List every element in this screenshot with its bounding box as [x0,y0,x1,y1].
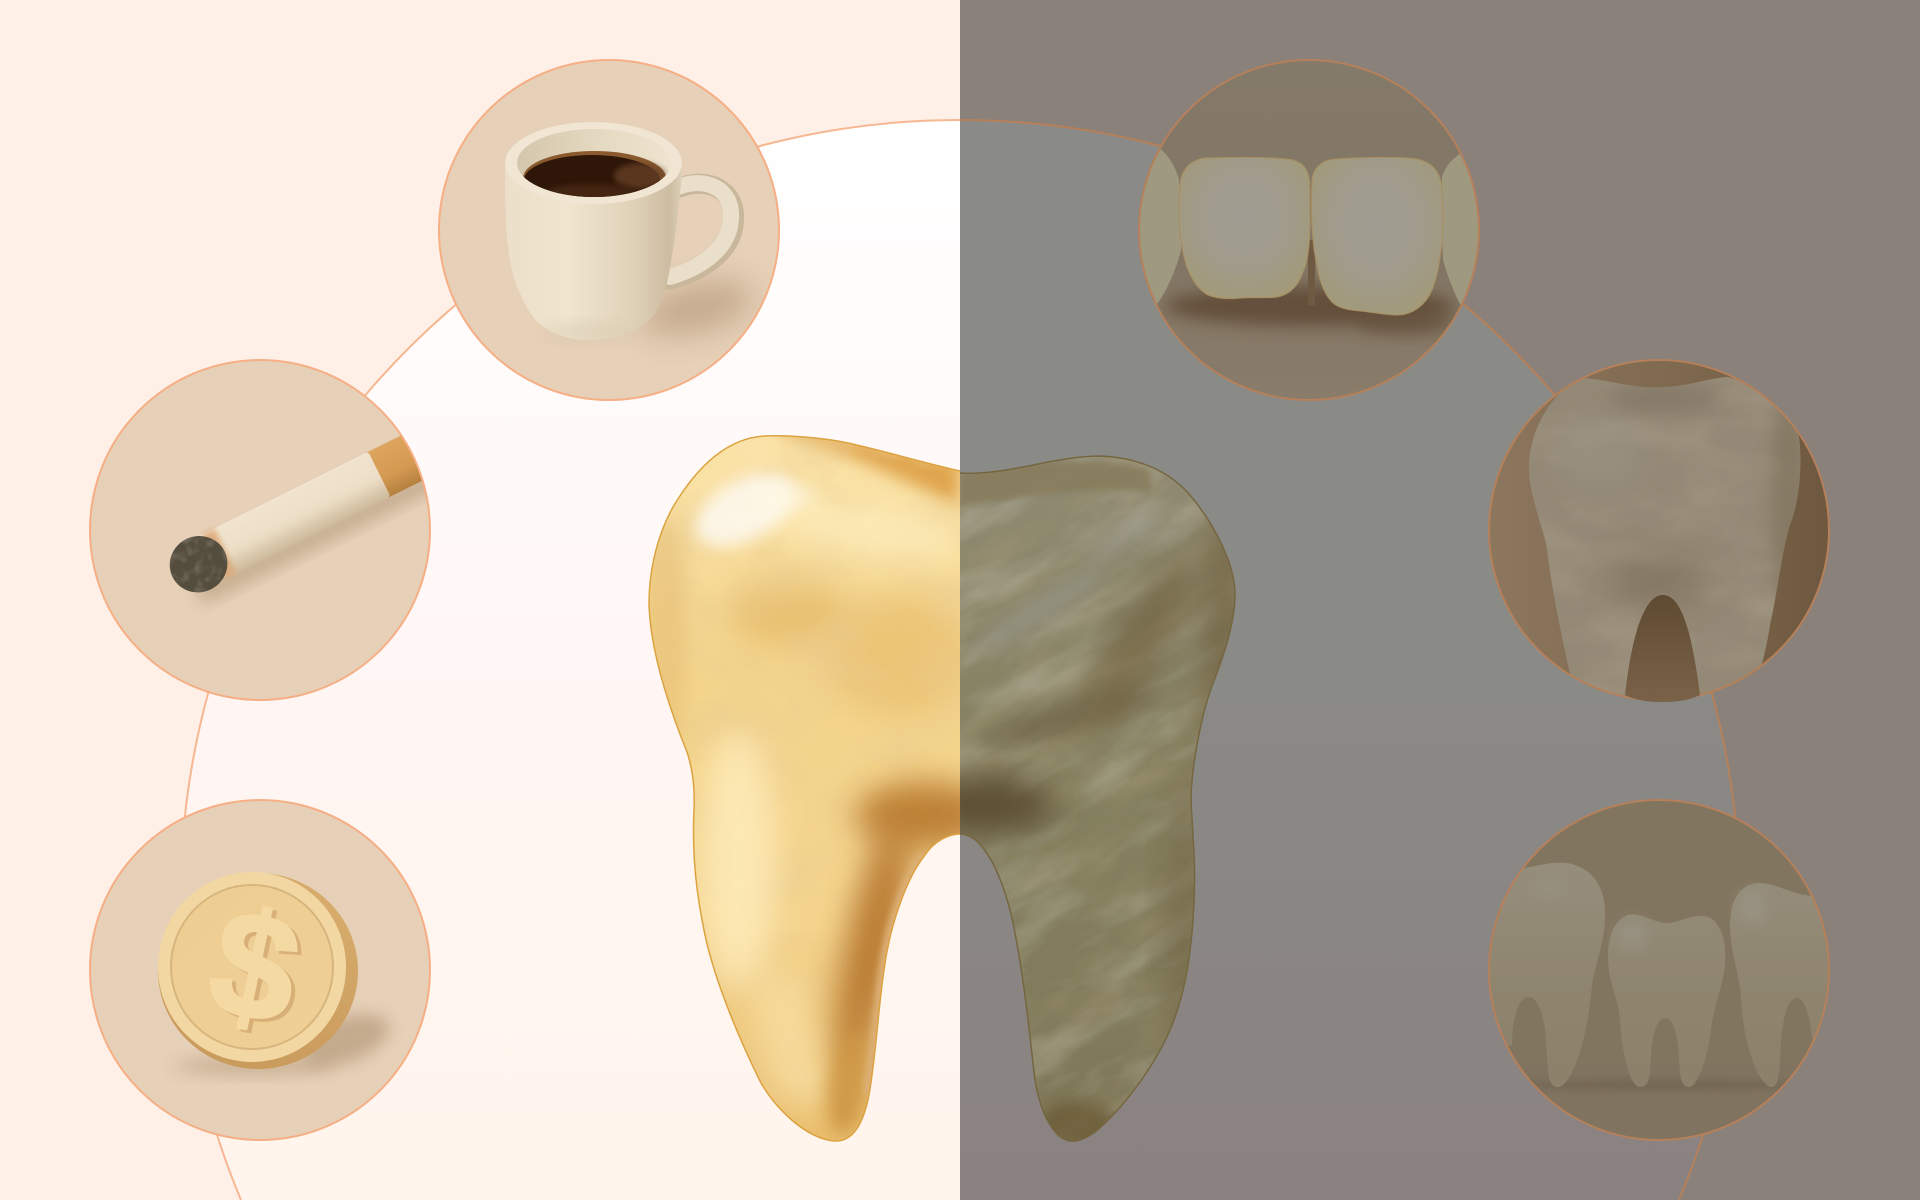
large central circle, darkened right half [960,120,1740,1200]
molar body [1529,377,1800,696]
damaged half of the tooth [960,457,1234,1140]
circle: cigarette [89,359,431,701]
circle: eroded molar [1489,360,1829,720]
healthy half outline [649,436,960,1141]
side tooth left [1140,150,1181,304]
molar root gap [1625,595,1700,702]
mug handle [670,183,734,280]
cigarette paper [200,452,390,556]
central circle outline, left side [180,120,960,1200]
healthy half of the tooth [650,436,960,1140]
right dark background panel [960,0,1920,1200]
coin face rim [158,872,346,1062]
damaged half outline [960,456,1235,1141]
side tooth right [1442,154,1478,305]
coin edge [158,873,358,1069]
left tooth [1480,863,1605,1087]
top ochre band [776,436,960,510]
middle tooth [1608,914,1725,1087]
left background [0,0,960,1200]
coffee surface [523,151,668,197]
mug interior [517,129,652,176]
right tooth [1730,883,1828,1087]
dollar sign shadow: $ [201,878,317,1060]
large central circle, left half [180,120,960,1200]
cigarette filter [366,436,422,498]
central circle outline, right side [960,120,1740,1200]
coin face [171,885,333,1049]
upper left incisor [1179,157,1310,299]
mug body [505,167,682,340]
upper right incisor [1311,157,1443,315]
dollar sign: $ [197,875,313,1057]
circle: dollar coin [90,800,430,1140]
cigarette ash [170,536,228,592]
circle: coffee mug [439,60,779,400]
circle: worn front teeth [1130,60,1490,400]
circle: row of three teeth [1480,800,1850,1140]
mug rim [505,122,682,204]
